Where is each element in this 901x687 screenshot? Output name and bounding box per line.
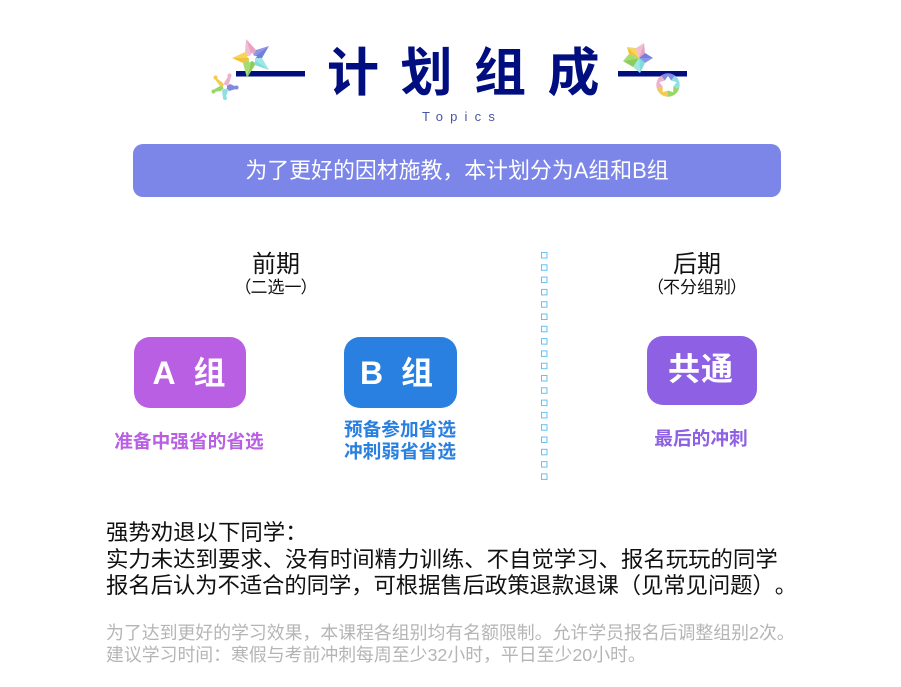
button: common: 共通 xyxy=(668,351,734,387)
text block: advice xyxy=(106,520,797,598)
title: 计划组成 xyxy=(327,45,621,103)
text block: footnote: 为了达到更好的学习效果，本课程各组别均有名额限制。允许学员报名后调整组别2次。 xyxy=(106,623,795,643)
text block: footnote: 建议学习时间：寒假与考前冲刺每周至少32小时，平日至少20小时。 xyxy=(106,645,646,665)
left title line xyxy=(236,71,305,76)
heading: early stage: 前期 xyxy=(252,251,300,278)
label: group B xyxy=(344,419,456,462)
button: group B xyxy=(344,337,457,408)
text block: advice: 强势劝退以下同学： xyxy=(106,520,308,545)
heading: late stage: 后期 xyxy=(673,251,721,278)
note: no grouping: （不分组别） xyxy=(647,278,747,297)
button: group A: A 组 xyxy=(153,355,225,391)
text block: advice: 实力未达到要求、没有时间精力训练、不自觉学习、报名玩玩的同学 xyxy=(106,546,778,572)
button: group B: B 组 xyxy=(360,355,433,391)
label: group A: 准备中强省的省选 xyxy=(114,431,264,452)
label: group B: 预备参加省选 xyxy=(344,419,456,440)
subtitle: Topics xyxy=(422,109,502,124)
text block: footnote xyxy=(106,623,795,665)
icon: right star xyxy=(623,43,653,73)
note: choose one: （二选一） xyxy=(234,278,318,297)
button: group A xyxy=(134,337,246,408)
button: common xyxy=(647,336,757,405)
label: common: 最后的冲刺 xyxy=(654,428,748,449)
icon: large left star xyxy=(232,39,269,78)
label: group B: 冲刺弱省省选 xyxy=(344,441,456,462)
icon: right ring xyxy=(656,73,680,97)
text block: advice: 报名后认为不适合的同学，可根据售后政策退款退课（见常见问题）。 xyxy=(106,573,797,598)
decorative title stars and lines xyxy=(212,39,687,100)
icon: small left star xyxy=(212,74,238,100)
right title line xyxy=(618,71,687,76)
banner xyxy=(133,144,781,197)
banner: 为了更好的因材施教，本计划分为A组和B组 xyxy=(245,158,669,183)
